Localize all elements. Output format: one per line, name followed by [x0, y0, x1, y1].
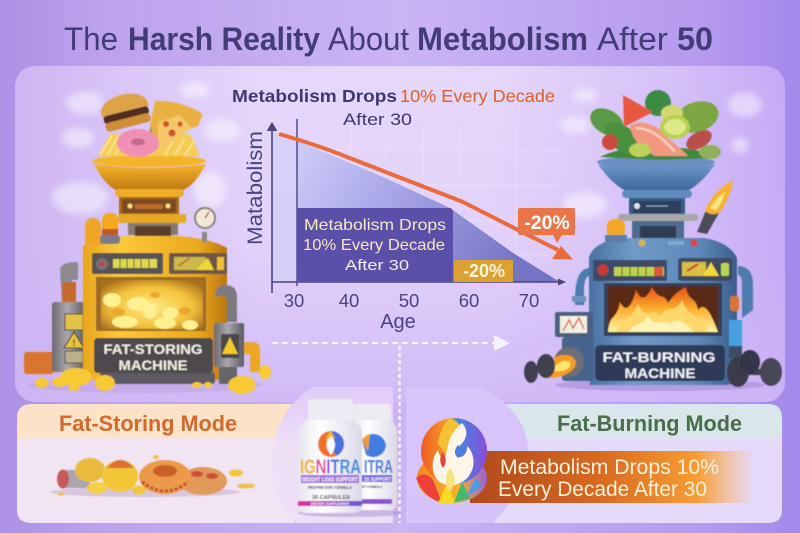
right tank [214, 285, 260, 384]
right valve and coolant [729, 296, 742, 358]
amber light [605, 219, 627, 242]
supplement bottles [298, 399, 402, 517]
card body [17, 438, 295, 523]
orange banner: Every Decade After 30 [498, 478, 707, 501]
age 30 marker [296, 119, 298, 286]
card header [17, 404, 296, 438]
machine body [83, 235, 227, 380]
furnace window with flames [604, 283, 722, 336]
mini chart monitor [555, 312, 593, 337]
title [64, 21, 713, 57]
spilled fat blobs [35, 365, 271, 394]
hopper [597, 156, 715, 238]
label plate [595, 345, 725, 381]
back bottle: RY FORMULA [362, 484, 382, 489]
flow arrow between machines [272, 335, 510, 351]
gold -20% badge: -20% [463, 261, 505, 281]
control panel left [92, 253, 163, 274]
bottom left card: fat-storing mode [17, 404, 296, 523]
floor shadow [555, 379, 765, 391]
center dashed divider [398, 346, 401, 523]
back bottle: ITRA [364, 457, 393, 477]
bottom right card: fat-burning mode [490, 404, 782, 523]
torch [697, 180, 733, 234]
title: About [328, 21, 409, 57]
machine body [589, 238, 737, 385]
label plate: FAT-STORING [104, 342, 202, 357]
orange -20% callout [518, 208, 575, 243]
axis tick labels: 70 [519, 290, 539, 311]
x axis [272, 281, 562, 283]
top indicator strip [638, 240, 698, 246]
icon: rainbow flame logo [416, 418, 487, 503]
front bottle [298, 399, 362, 513]
label plate: FAT-BURNING [602, 349, 716, 365]
heading: Fat-Storing Mode [59, 411, 237, 436]
bottle logo [318, 431, 344, 457]
fat-burning heading: Fat-Burning Mode [557, 411, 742, 436]
axis tick labels: 40 [339, 290, 359, 311]
brand name: IGNITRA [300, 456, 361, 478]
arrowhead [552, 246, 573, 260]
bottle shadow [298, 509, 402, 517]
control panel right [169, 253, 227, 274]
axis tick labels: 30 [284, 290, 304, 311]
food illustration [50, 455, 255, 497]
orange banner [470, 451, 755, 503]
right halo behind logo [406, 387, 528, 523]
left dumbbell [524, 354, 555, 383]
card header [500, 404, 782, 438]
window of stored fat [96, 277, 206, 331]
clouds [52, 82, 762, 218]
y axis [268, 124, 276, 293]
x axis label: Age [380, 311, 416, 333]
back bottle [352, 404, 397, 510]
axis tick labels: 50 [399, 290, 419, 311]
back bottle: SS SUPPORT [364, 477, 391, 483]
chart heading: 10% Every Decade [400, 86, 555, 106]
chart heading [232, 86, 555, 129]
fat-burning machine [524, 90, 782, 391]
label plate [94, 338, 213, 373]
faint grid [272, 125, 560, 282]
right dumbbell [727, 350, 782, 387]
y axis label: Matabolism [244, 131, 267, 245]
control panel left [593, 260, 667, 281]
fat-storing machine [24, 89, 271, 394]
orange decline line [279, 134, 558, 250]
title: The [64, 21, 118, 57]
purple callout: Metabolism Drops [304, 217, 446, 234]
control panel right [678, 258, 732, 281]
axis tick labels [284, 290, 539, 311]
front bottle: 30 CAPSULES [312, 495, 350, 501]
purple callout: 10% Every Decade [303, 237, 445, 254]
left burner nozzle with flame [541, 337, 594, 381]
card body [490, 438, 782, 523]
label plate: MACHINE [118, 358, 188, 373]
orange banner: Metabolism Drops 10% [500, 456, 719, 479]
label plate: MACHINE [624, 365, 696, 381]
left halo behind product [272, 387, 393, 523]
title: After [597, 21, 668, 57]
hopper [92, 155, 206, 236]
chart heading: Metabolism Drops [232, 86, 397, 106]
orange box [24, 352, 54, 374]
area left of age 30 [272, 131, 297, 282]
chart: metabolism decline [232, 86, 575, 333]
front bottle: PROPRIETARY FORMULA [308, 485, 353, 490]
area under the curve [297, 141, 560, 282]
title: Harsh Reality [128, 21, 320, 57]
chart heading: After 30 [343, 110, 412, 129]
title: Metabolism [417, 21, 588, 57]
floor shadow [27, 377, 263, 393]
left tank [52, 262, 86, 372]
front bottle: WEIGHT LOSS SUPPORT [302, 478, 358, 484]
gold -20% badge [454, 260, 513, 282]
front bottle: DIETARY SUPPLEMENT [311, 502, 350, 506]
amber lights [85, 213, 120, 245]
healthy food pile [585, 90, 723, 160]
junk food pile [98, 89, 203, 157]
purple callout: After 30 [345, 258, 409, 274]
left tank: ! [72, 338, 76, 348]
title: 50 [677, 21, 713, 57]
main panel [15, 66, 785, 402]
pressure gauge [195, 208, 215, 242]
orange -20% callout: -20% [524, 212, 570, 234]
side pipes [572, 266, 753, 318]
axis tick labels: 60 [459, 290, 479, 311]
purple callout [297, 208, 453, 282]
